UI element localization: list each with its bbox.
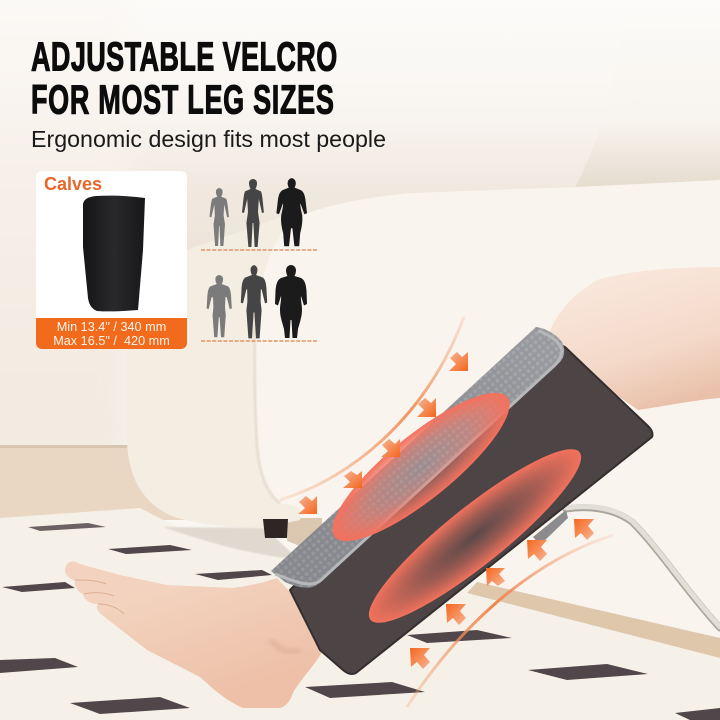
size range band: Max 16.5" / 420 mm [53,334,170,348]
figure slim male [207,275,232,337]
air connector [533,510,568,545]
dashed ground lines [201,250,317,341]
background room [0,0,720,546]
figure large [276,178,307,246]
arrows pressing inward from top [298,352,468,514]
title: FOR MOST LEG SIZES [31,78,334,123]
sofa lower cushion [126,210,300,528]
calves label: Calves [44,174,102,194]
figure large male [275,265,307,338]
floor strip under sofa [467,582,720,658]
icon: black calf sleeve [83,196,145,311]
calf skin [545,267,720,410]
size range band: Min 13.4" / 340 mm [57,320,166,334]
body type figures: bottom row [207,265,307,338]
figure slim [209,188,229,246]
heat zone upper [315,372,527,562]
power cord [566,507,720,628]
title [31,35,337,123]
figure medium male [241,265,267,338]
subtitle: Ergonomic design fits most people [31,126,386,152]
title: ADJUSTABLE VELCRO [31,35,337,80]
arrows pressing inward from bottom [410,519,594,669]
rug [0,508,720,720]
upper compression arc [280,317,464,500]
rug diamond pattern [0,523,720,720]
sofa back cushion [575,0,720,187]
sofa foot [263,519,288,538]
panel: calves size card [36,171,187,349]
figure medium [242,179,264,247]
lower compression arc [407,535,613,707]
foot [65,562,322,708]
sleeve grey flap [271,327,564,588]
sofa seat bolster [255,180,720,638]
heat zone lower [352,430,598,642]
sleeve dark body [290,335,652,674]
body type figures: top row [209,178,307,247]
leg sleeve [271,327,652,674]
size range band [36,318,187,349]
